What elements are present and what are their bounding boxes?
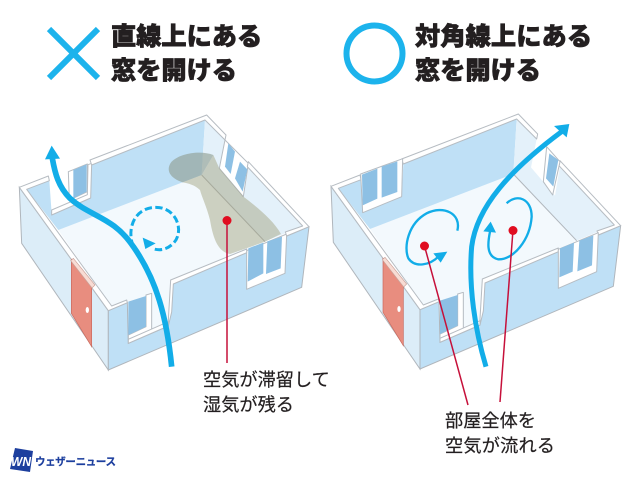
door xyxy=(71,258,95,347)
heading: diagonal windows xyxy=(415,23,592,85)
back-right floor edge xyxy=(202,175,265,242)
front wall outer face xyxy=(108,227,309,370)
heading: diagonal windows: 対角線上にある xyxy=(415,23,592,51)
callout: left swirl leader xyxy=(420,242,468,405)
arrow: dashed stagnant swirl xyxy=(131,207,179,250)
room shell xyxy=(331,114,621,369)
front-right window xyxy=(247,234,287,289)
right window frame xyxy=(219,140,248,197)
damp stagnant air patch on floor and right wall xyxy=(183,155,281,254)
heading: straight-line windows xyxy=(111,23,262,85)
callout: stagnant air leader xyxy=(222,216,232,363)
back-left window frame xyxy=(68,164,87,200)
damp stagnant air patch on wall xyxy=(169,153,213,182)
arrow: right swirl xyxy=(483,198,532,259)
logo: Weathernews: WN xyxy=(11,454,32,469)
right window xyxy=(543,147,560,195)
front-left window xyxy=(128,293,168,343)
wall rims xyxy=(19,115,309,326)
back window xyxy=(361,159,403,213)
icon: cross mark xyxy=(49,29,98,78)
arrow: left swirl xyxy=(407,210,458,264)
back wall interior xyxy=(27,120,205,230)
callout: right swirl leader xyxy=(500,226,518,402)
callout: whole room text xyxy=(445,411,555,456)
front-right window xyxy=(558,233,598,288)
callout: whole room text: 部屋全体を xyxy=(445,411,536,431)
back-left window pane xyxy=(73,164,87,198)
callout: stagnant air text: 湿気が残る xyxy=(203,395,294,415)
logo: Weathernews: ウェザーニュース xyxy=(35,456,116,468)
right window panes xyxy=(225,143,247,192)
heading: straight-line windows: 直線上にある xyxy=(111,23,262,51)
callout: whole room text: 空気が流れる xyxy=(445,436,555,456)
back-left window sill and jamb xyxy=(52,163,92,215)
panel: room with diagonal ventilation xyxy=(331,114,621,369)
heading: straight-line windows: 窓を開ける xyxy=(111,57,237,85)
arrow: straight airflow xyxy=(45,146,172,367)
heading: diagonal windows: 窓を開ける xyxy=(415,57,541,85)
panel: room with straight-line ventilation xyxy=(19,115,309,370)
callout: stagnant air text: 空気が滞留して xyxy=(203,370,330,390)
right wall interior xyxy=(202,120,303,242)
icon: circle mark xyxy=(346,26,402,82)
logo: Weathernews xyxy=(10,448,116,472)
arrow: diagonal airflow xyxy=(471,124,569,367)
callout: stagnant air text xyxy=(203,370,330,415)
left wall outer face xyxy=(19,187,108,370)
floor xyxy=(58,175,265,330)
